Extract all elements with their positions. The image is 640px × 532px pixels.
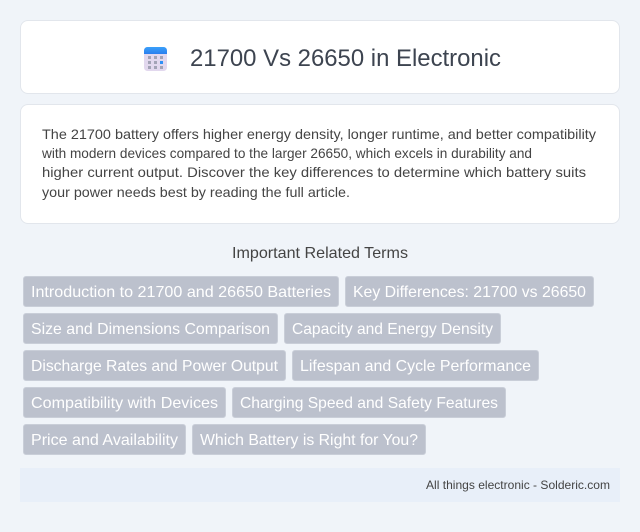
chip: capacity <box>284 313 501 344</box>
chip: size: Size and Dimensions Comparison <box>31 321 270 338</box>
chip: introduction: Introduction to 21700 and 26650 Batteries <box>31 284 331 301</box>
chip: price: Price and Availability <box>31 432 178 449</box>
icon: calendar <box>144 47 167 71</box>
footer <box>20 468 620 502</box>
chip: lifespan <box>292 350 539 381</box>
chip: which battery <box>192 424 426 455</box>
chip: key differences: Key Differences: 21700 vs 26650 <box>353 284 586 301</box>
chip: price <box>23 424 186 455</box>
chip: capacity: Capacity and Energy Density <box>292 321 493 338</box>
panel: summary text: your power needs best by reading the full article. <box>42 184 350 200</box>
title: 21700 Vs 26650 in Electronic <box>190 45 501 72</box>
chip: key differences <box>345 276 594 307</box>
chip: discharge: Discharge Rates and Power Output <box>31 358 279 375</box>
chip: introduction <box>23 276 339 307</box>
panel: summary text: with modern devices compared to the larger 26650, which excels in durability and <box>41 145 532 161</box>
panel: title card <box>20 20 620 94</box>
chip: discharge <box>23 350 286 381</box>
chip: lifespan: Lifespan and Cycle Performance <box>300 358 531 375</box>
chip: size <box>23 313 278 344</box>
chip: charging: Charging Speed and Safety Features <box>240 395 498 412</box>
panel: summary text: higher current output. Discover the key differences to determine which battery suits <box>42 164 586 180</box>
footer: All things electronic - Solderic.com <box>426 478 610 492</box>
heading: related terms: Important Related Terms <box>232 245 408 262</box>
panel: summary text: The 21700 battery offers higher energy density, longer runtime, and better compatibility <box>42 126 596 142</box>
chip: charging <box>232 387 506 418</box>
chip: compatibility: Compatibility with Devices <box>31 395 218 412</box>
panel: summary text <box>20 104 620 224</box>
chip: which battery: Which Battery is Right for You? <box>200 432 418 449</box>
chip: compatibility <box>23 387 226 418</box>
